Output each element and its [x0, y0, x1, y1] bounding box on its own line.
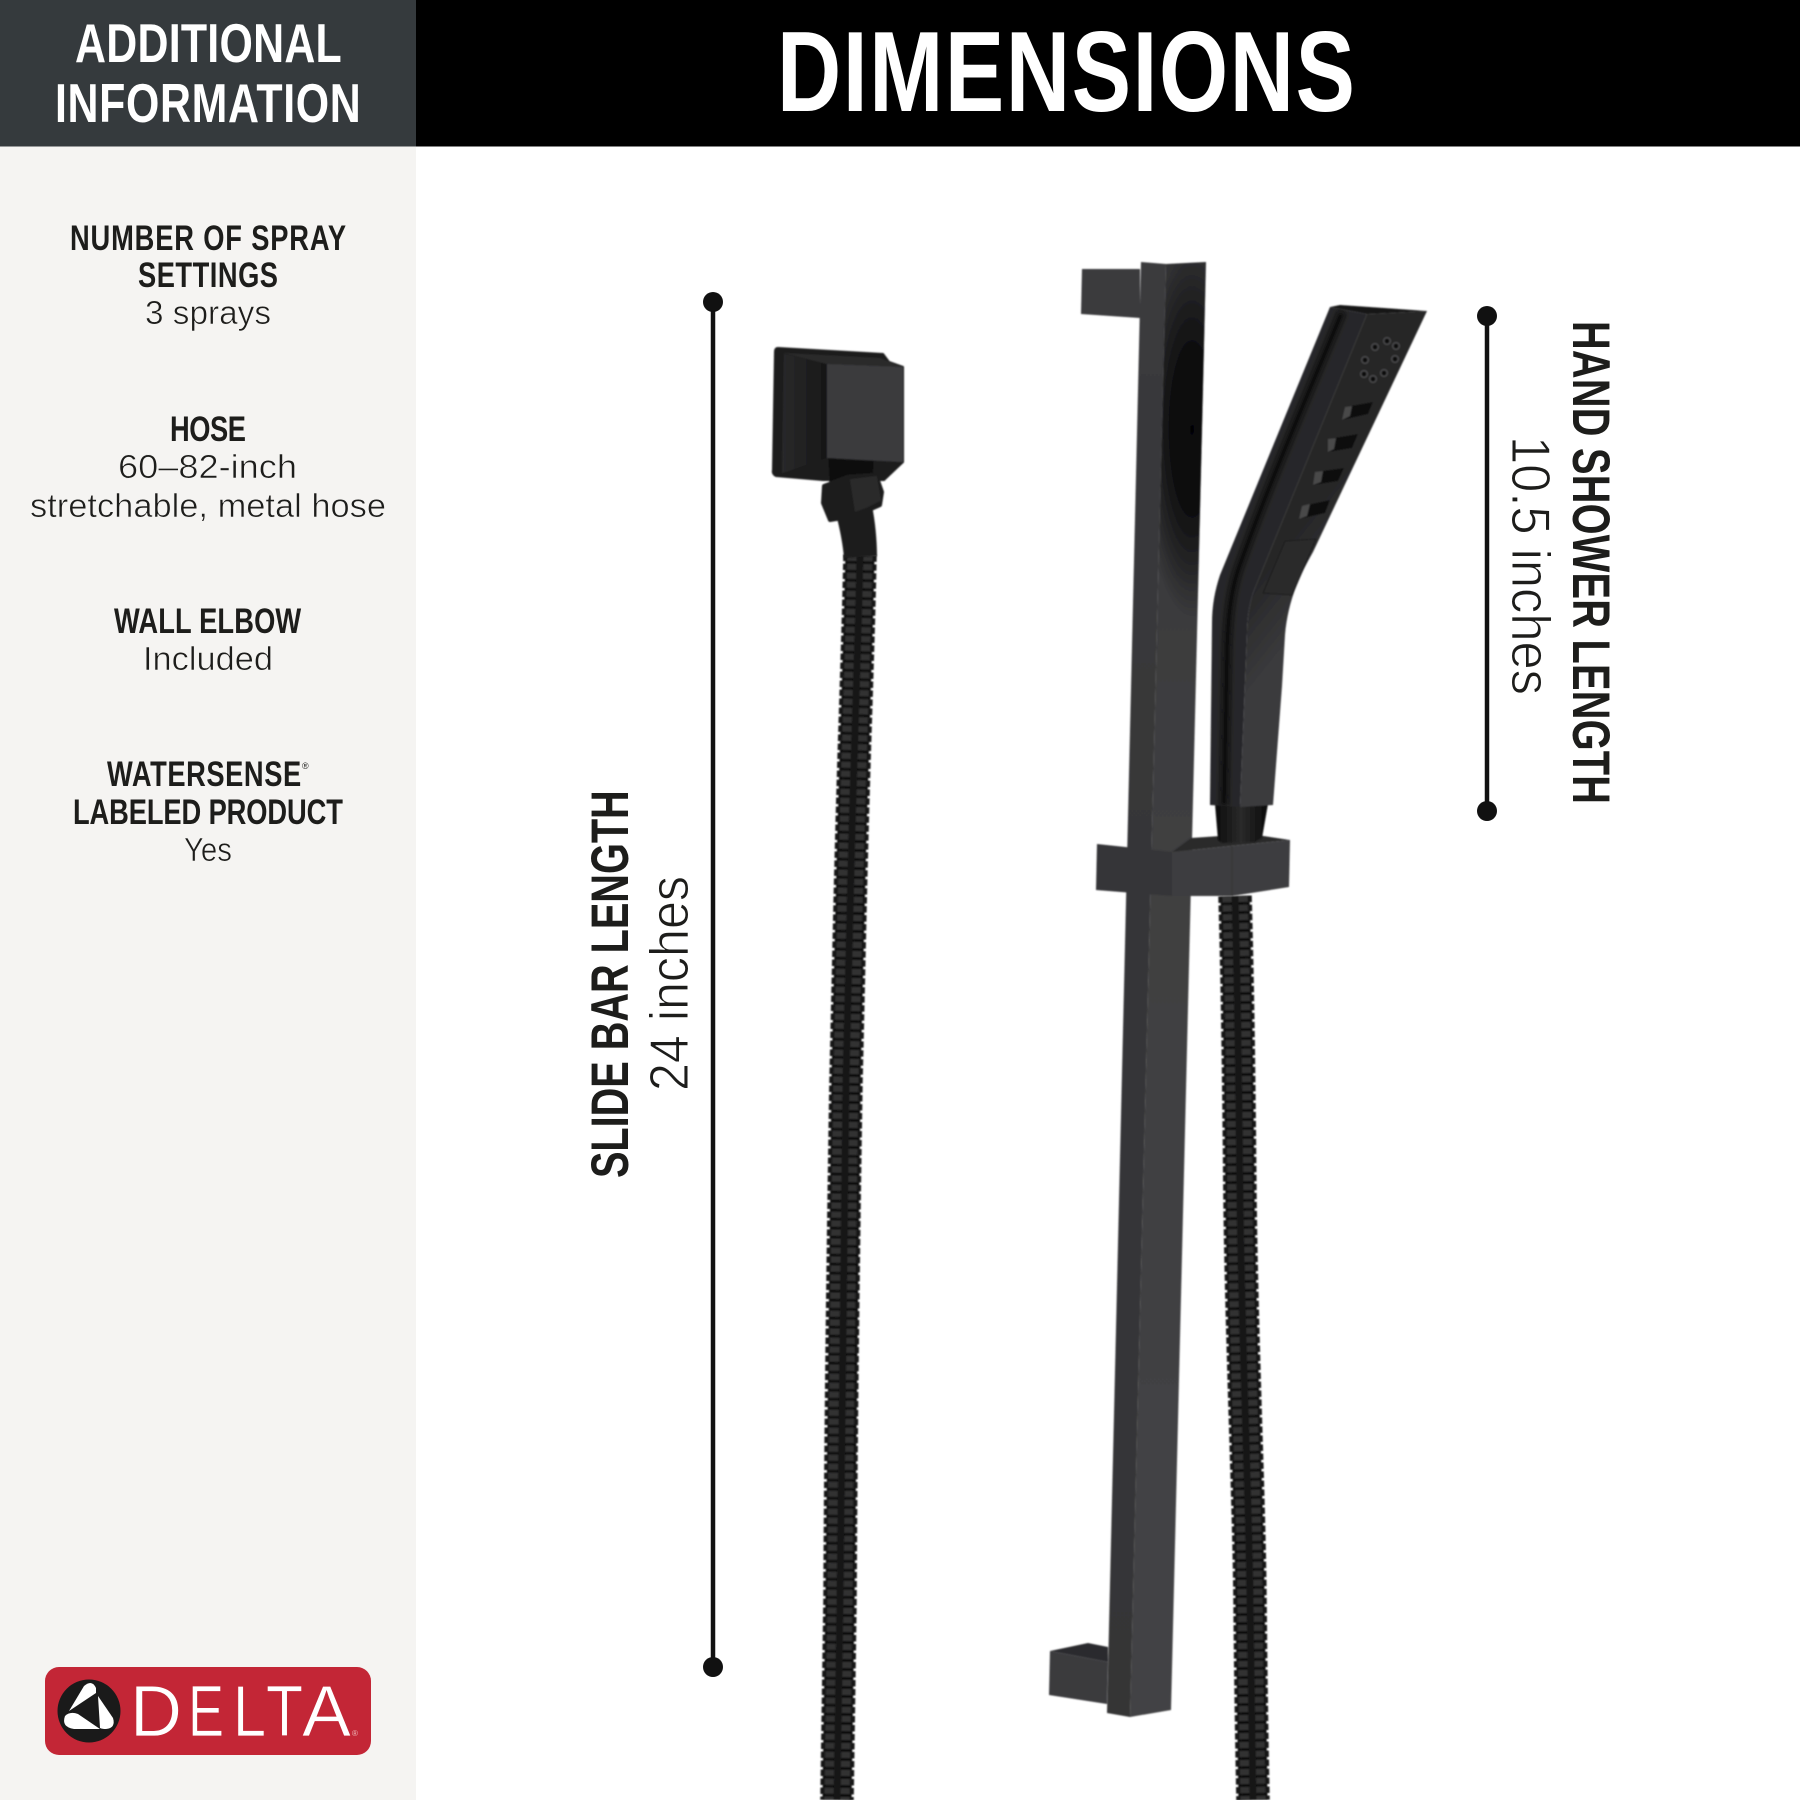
logo: delta: L [233, 1672, 266, 1752]
label: slide bar length: 24 inches [638, 876, 700, 1091]
left face [1210, 307, 1367, 807]
spec: wall elbow: Included [143, 640, 273, 677]
spec: number of spray settings: SETTINGS [138, 256, 278, 295]
spec: wall elbow: WALL ELBOW [114, 602, 302, 641]
front face [1240, 311, 1427, 807]
label: hand shower length: 10.5 inches [1500, 436, 1562, 695]
dimension line: hand shower [1477, 306, 1497, 821]
spray nozzles [1299, 402, 1373, 519]
panel: sidebar background [0, 146, 416, 1800]
logo: delta: ® [352, 1729, 358, 1738]
spec: number of spray settings [70, 219, 346, 331]
logo: delta: A [302, 1672, 351, 1752]
spec: hose: HOSE [170, 410, 246, 449]
logo: delta: E [188, 1672, 224, 1752]
bottom bracket [1050, 1643, 1108, 1662]
spec: number of spray settings: 3 sprays [145, 294, 271, 331]
spec: hose [30, 410, 386, 524]
spec: watersense labeled product: ® [302, 761, 309, 771]
product: slide bar [1049, 240, 1290, 1717]
spec: watersense labeled product: WATERSENSE [107, 755, 301, 794]
logo: delta: D [130, 1672, 182, 1752]
spec: watersense labeled product: Yes [184, 831, 232, 868]
product: wall elbow [773, 348, 903, 558]
label: slide bar length: SLIDE BAR LENGTH [580, 790, 639, 1178]
dimension line: slide bar [703, 292, 723, 1677]
product: shower hose [1235, 896, 1253, 1800]
neck [1215, 804, 1268, 843]
header: additional information: INFORMATION [55, 73, 361, 134]
top bracket [1081, 269, 1140, 318]
header: dimensions title [416, 0, 1800, 146]
spec: hose: stretchable, metal hose [30, 487, 386, 524]
header: additional information: ADDITIONAL [75, 13, 342, 74]
header: dimensions title: DIMENSIONS [777, 7, 1355, 136]
product: hand shower [1210, 305, 1427, 843]
label: hand shower length: HAND SHOWER LENGTH [1562, 321, 1621, 804]
label: slide bar length [580, 790, 700, 1178]
label: hand shower length [1500, 321, 1621, 804]
spec: watersense labeled product: LABELED PRODUCT [73, 793, 343, 832]
spec: number of spray settings: NUMBER OF SPRAY [70, 219, 346, 258]
logo: delta [45, 1667, 371, 1755]
logo: delta: T [266, 1672, 303, 1752]
spec: hose: 60–82-inch [118, 448, 297, 485]
bar left face [1107, 262, 1166, 1717]
spec: watersense labeled product [73, 755, 343, 868]
spray holes [1361, 338, 1399, 382]
button panel [1263, 539, 1316, 595]
header: additional information [0, 0, 416, 146]
spec: wall elbow [114, 602, 302, 677]
slider mount [1172, 834, 1290, 852]
product: wall hose [837, 555, 860, 1800]
bar right face [1130, 262, 1206, 1717]
